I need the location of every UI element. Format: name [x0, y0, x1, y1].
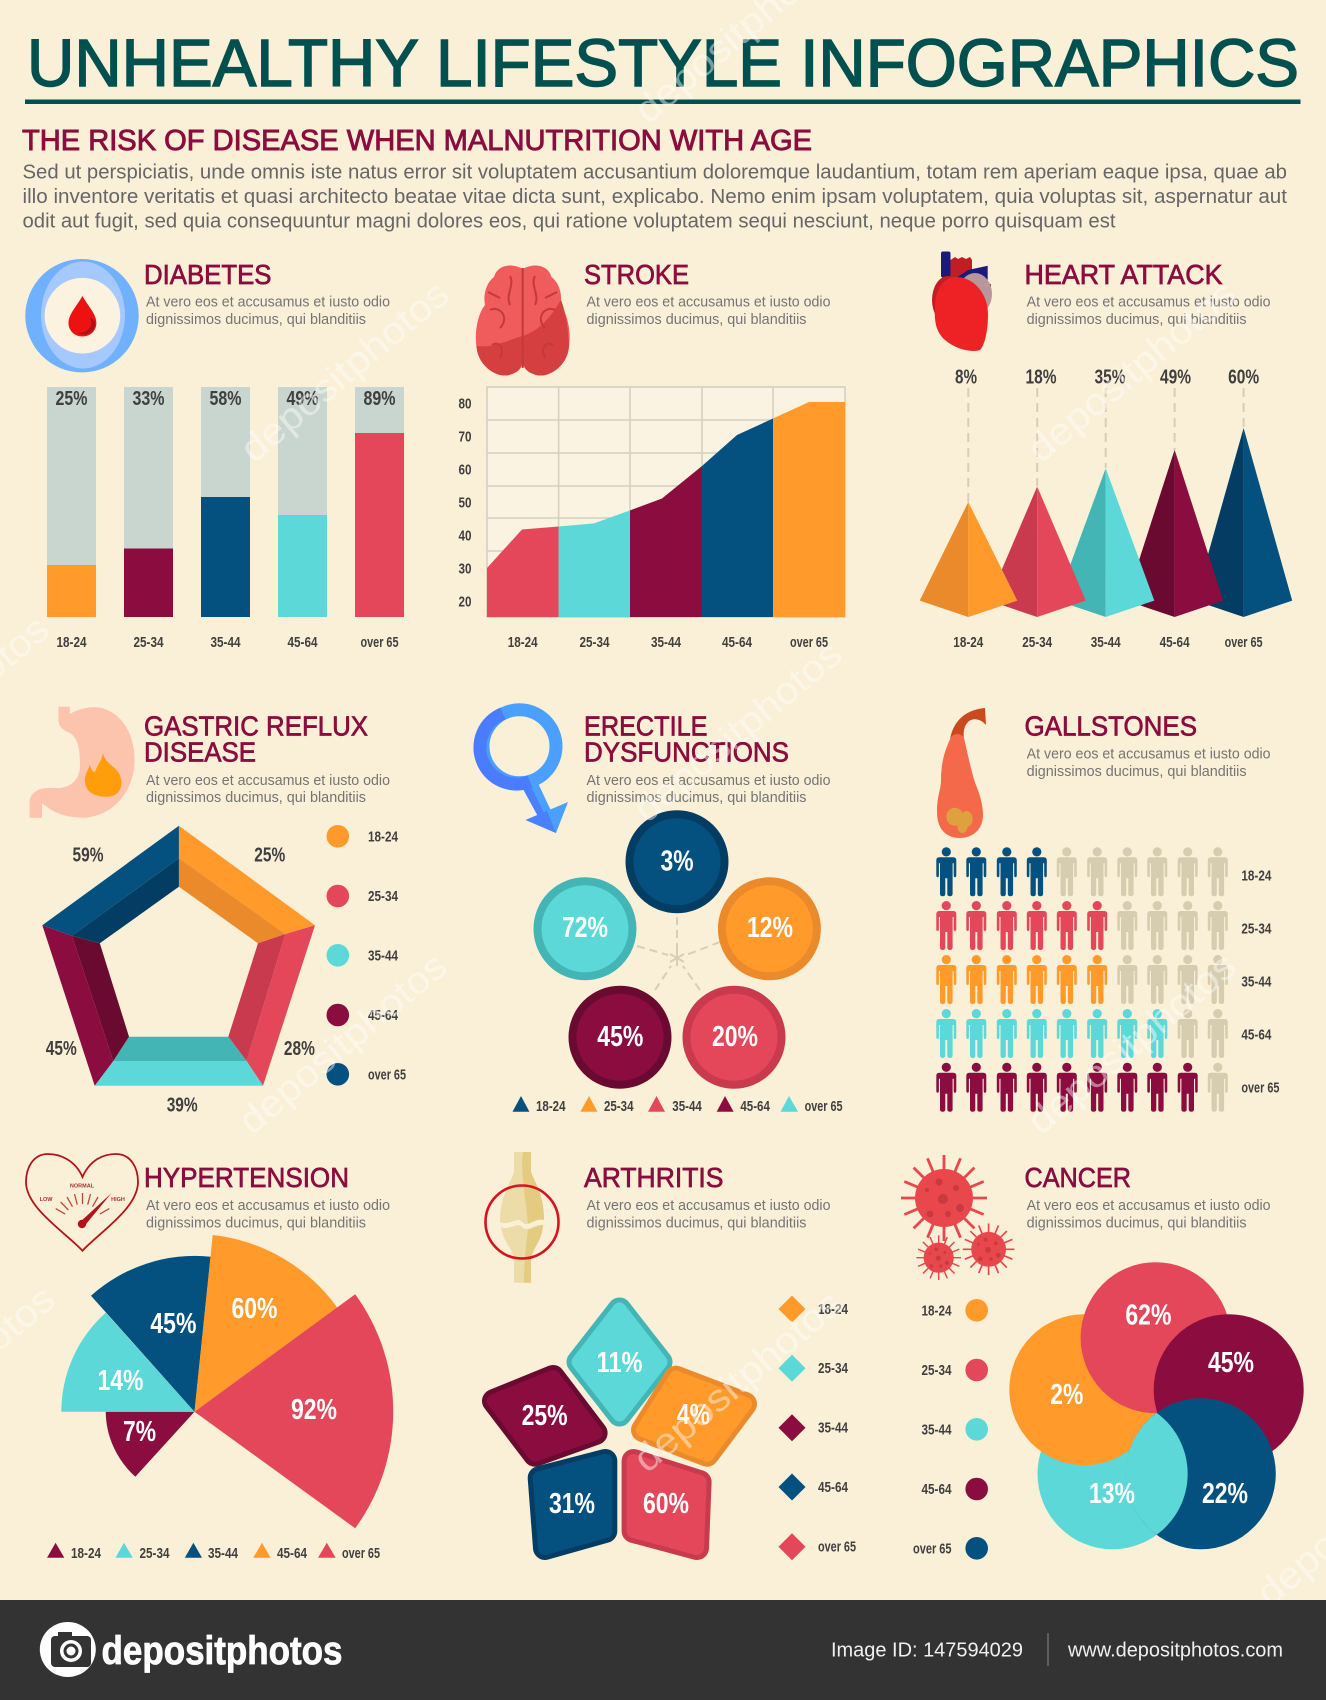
bubble chart: 3%: [660, 846, 694, 878]
area chart: 18-24: [508, 634, 538, 651]
bubble chart: 12%: [747, 912, 793, 944]
bar chart: 33%: [132, 388, 165, 410]
area chart: 20: [458, 594, 472, 610]
panel: heart attack: [920, 252, 1292, 651]
legend: 45-64: [368, 1007, 399, 1024]
icon: blood drop ring: [25, 259, 139, 372]
area chart: over 65: [790, 634, 828, 651]
subtitle: THE RISK OF DISEASE WHEN MALNUTRITION WITH AGE: [22, 125, 812, 157]
description: At vero eos et accusamus et iusto odio: [1027, 294, 1271, 310]
description: At vero eos et accusamus et iusto odio: [586, 1198, 830, 1214]
pictogram chart: over 65: [1241, 1080, 1279, 1096]
heading: ARTHRITIS: [584, 1162, 724, 1193]
pictogram chart: 45-64: [1241, 1026, 1272, 1044]
description: At vero eos et accusamus et iusto odio: [586, 773, 830, 789]
polar pie chart: 92%: [291, 1394, 337, 1426]
footer bar: [0, 1600, 1326, 1700]
bar chart: 45-64: [288, 634, 318, 651]
heading: [144, 710, 368, 768]
icon: male symbol: [480, 710, 568, 833]
area chart: 60: [458, 462, 472, 478]
divider and site url: www.depositphotos.com: [1067, 1640, 1283, 1662]
logo wordmark: depositphotos: [102, 1629, 342, 1673]
description: [1027, 294, 1271, 328]
pyramid chart: 45-64: [1160, 634, 1190, 651]
description: [146, 773, 390, 806]
legend: [326, 825, 406, 1086]
legend: 25-34: [368, 888, 399, 905]
legend: 35-44: [818, 1420, 849, 1436]
area chart: 30: [458, 560, 472, 578]
description: dignissimos ducimus, qui blanditiis: [1027, 1216, 1247, 1232]
description: dignissimos ducimus, qui blanditiis: [586, 1216, 806, 1232]
description: [146, 1198, 390, 1232]
legend: 18-24: [818, 1301, 849, 1318]
legend: 45-64: [922, 1481, 952, 1498]
polar pie chart: 7%: [123, 1416, 156, 1448]
icon: heart gauge: LOW: [40, 1197, 53, 1203]
pentagon chart: 25%: [254, 844, 285, 866]
watermarks: depositphotos: [626, 633, 850, 831]
bubble chart: [538, 814, 817, 1085]
legend: 25-34: [604, 1098, 634, 1115]
description: dignissimos ducimus, qui blanditiis: [586, 312, 806, 328]
description: dignissimos ducimus, qui blanditiis: [1027, 312, 1247, 328]
heading: GASTRIC REFLUX: [144, 710, 368, 742]
bar chart: 49%: [286, 388, 319, 410]
description: At vero eos et accusamus et iusto odio: [146, 773, 390, 789]
bar chart: 18-24: [56, 634, 87, 651]
rounded pentagon chart: 25%: [522, 1400, 568, 1432]
rounded pentagon chart: 31%: [549, 1488, 595, 1520]
description: At vero eos et accusamus et iusto odio: [146, 1198, 390, 1214]
heading: ERECTILE: [584, 710, 708, 742]
watermarks: depositphotos: [626, 1283, 850, 1481]
bar chart: 89%: [364, 388, 396, 410]
pentagon chart: 28%: [284, 1038, 315, 1060]
legend: over 65: [913, 1540, 952, 1558]
pentagon chart: [42, 826, 315, 1116]
panel: cancer: [901, 1155, 1304, 1560]
legend: 18-24: [368, 828, 399, 846]
image id: Image ID: 147594029: [831, 1640, 1023, 1662]
venn chart: 2%: [1050, 1379, 1083, 1411]
panel: arthritis: [486, 1152, 856, 1560]
icon: heart gauge: [26, 1154, 138, 1251]
pyramid chart: over 65: [1225, 634, 1263, 651]
heading: DISEASE: [144, 736, 256, 768]
pyramid chart: 35%: [1094, 366, 1126, 388]
bar chart: 35-44: [210, 634, 241, 651]
icon: camera logo: [40, 1622, 96, 1677]
pictogram chart: 18-24: [1241, 868, 1272, 884]
panel: diabetes: [25, 259, 404, 651]
legend: 45-64: [740, 1098, 770, 1115]
icon: heart gauge: HIGH: [111, 1197, 125, 1203]
description: [586, 294, 830, 328]
pictogram chart: 35-44: [1241, 974, 1272, 990]
pictogram chart: [936, 847, 1279, 1112]
polar pie chart: 14%: [98, 1365, 144, 1397]
heading: GALLSTONES: [1024, 710, 1197, 742]
heading: HYPERTENSION: [144, 1162, 349, 1193]
title: UNHEALTHY LIFESTYLE INFOGRAPHICS: [27, 26, 1299, 101]
legend: [913, 1299, 988, 1560]
legend: 35-44: [208, 1545, 239, 1562]
rounded pentagon chart: 60%: [643, 1488, 689, 1520]
pyramid chart: 18%: [1026, 366, 1057, 388]
description: At vero eos et accusamus et iusto odio: [586, 294, 830, 310]
pentagon chart: 59%: [72, 844, 104, 866]
bar chart: [47, 387, 404, 651]
heading: DIABETES: [144, 259, 272, 290]
legend: 45-64: [818, 1479, 849, 1496]
bar chart: 25%: [56, 388, 88, 410]
venn chart: 62%: [1125, 1300, 1172, 1332]
area chart: [458, 387, 845, 651]
description: [586, 773, 830, 806]
description: dignissimos ducimus, qui blanditiis: [1027, 764, 1247, 780]
pyramid chart: 35-44: [1091, 634, 1121, 651]
legend: 25-34: [140, 1545, 170, 1562]
description: [146, 294, 390, 328]
watermarks: depositphotos: [1020, 945, 1244, 1143]
icon: stomach with flame: [30, 707, 135, 818]
description: At vero eos et accusamus et iusto odio: [146, 294, 390, 310]
description: dignissimos ducimus, qui blanditiis: [586, 790, 806, 806]
icon: cancer cells: [901, 1155, 1014, 1280]
polar pie chart: 45%: [150, 1308, 197, 1340]
description: dignissimos ducimus, qui blanditiis: [146, 1216, 366, 1232]
icon: heart gauge: NORMAL: [70, 1184, 95, 1190]
legend: 35-44: [922, 1422, 952, 1438]
heading: [584, 710, 789, 768]
intro text block: [22, 162, 1287, 232]
panel: gastric reflux disease: [30, 707, 406, 1116]
description: At vero eos et accusamus et iusto odio: [1027, 1198, 1271, 1214]
venn chart: 45%: [1208, 1347, 1254, 1379]
legend: [778, 1296, 856, 1560]
bar chart: 58%: [210, 388, 242, 410]
rounded pentagon chart: [494, 1310, 745, 1548]
watermarks: depositphotos: [233, 273, 457, 471]
watermarks: depositphotos: [1020, 273, 1244, 471]
description: [1027, 746, 1271, 780]
heading: DYSFUNCTIONS: [584, 736, 789, 768]
pentagon chart: 45%: [46, 1038, 77, 1060]
venn chart: [1009, 1262, 1304, 1549]
intro text block: odit aut fugit, sed quia consequuntur magni dolores eos, qui ratione voluptatem sequi nesciunt, neque porro quisquam est: [22, 210, 1116, 232]
panel: hypertension: [26, 1154, 393, 1562]
pictogram chart: 25-34: [1241, 920, 1272, 938]
legend: 45-64: [277, 1545, 308, 1562]
legend: over 65: [805, 1098, 843, 1115]
description: dignissimos ducimus, qui blanditiis: [146, 312, 366, 328]
rounded pentagon chart: 11%: [596, 1347, 643, 1379]
pentagon chart: 39%: [167, 1094, 198, 1116]
legend: 25-34: [818, 1360, 849, 1377]
legend: [47, 1543, 380, 1562]
rounded pentagon chart: 4%: [677, 1399, 710, 1431]
legend: over 65: [342, 1545, 380, 1562]
pyramid chart: 60%: [1228, 366, 1259, 388]
description: [586, 1198, 830, 1232]
icon: gallbladder: [937, 708, 986, 838]
legend: [512, 1096, 843, 1115]
description: [1027, 1198, 1271, 1232]
watermarks: depositphotos: [231, 945, 455, 1143]
icon: knee joint: [486, 1152, 558, 1283]
bar chart: over 65: [360, 634, 398, 651]
pyramid chart: [920, 366, 1292, 651]
pyramid chart: 18-24: [953, 634, 984, 651]
area chart: 25-34: [580, 634, 610, 651]
panel: gallstones: [936, 708, 1279, 1112]
bar chart: 25-34: [134, 634, 164, 651]
bubble chart: 72%: [562, 912, 608, 944]
legend: 35-44: [672, 1098, 702, 1115]
intro text block: Sed ut perspiciatis, unde omnis iste natus error sit voluptatem accusantium doloremque laudantium, totam rem aperiam eaque ipsa, quae ab: [22, 162, 1287, 184]
legend: 18-24: [922, 1302, 952, 1320]
bubble chart: 20%: [712, 1021, 758, 1053]
area chart: 40: [458, 528, 472, 544]
venn chart: 22%: [1202, 1478, 1248, 1510]
area chart: 35-44: [651, 634, 682, 651]
heading: CANCER: [1024, 1162, 1131, 1193]
bubble chart: 45%: [597, 1021, 643, 1053]
pyramid chart: 8%: [955, 366, 977, 388]
legend: 18-24: [71, 1545, 102, 1562]
panel: erectile dysfunctions: [480, 710, 843, 1115]
heading: HEART ATTACK: [1024, 259, 1223, 290]
heading: STROKE: [584, 259, 689, 290]
venn chart: 13%: [1089, 1478, 1135, 1510]
legend: 35-44: [368, 948, 399, 964]
area chart: 45-64: [722, 634, 753, 651]
area chart: 70: [458, 428, 472, 446]
legend: 18-24: [536, 1098, 566, 1115]
area chart: 80: [458, 396, 472, 412]
panel: stroke: [458, 259, 845, 651]
icon: heart: [932, 252, 992, 351]
polar pie chart: [61, 1235, 393, 1528]
icon: brain: [476, 266, 570, 376]
area chart: 50: [458, 494, 472, 512]
pyramid chart: 49%: [1160, 366, 1191, 388]
legend: over 65: [368, 1066, 406, 1084]
intro text block: illo inventore veritatis et quasi architecto beatae vitae dicta sunt, explicabo. Nemo enim ipsam voluptatem, quia voluptas sit, aspernatur aut: [22, 186, 1287, 208]
legend: over 65: [818, 1538, 856, 1556]
legend: 25-34: [922, 1362, 952, 1379]
description: At vero eos et accusamus et iusto odio: [1027, 746, 1271, 762]
polar pie chart: 60%: [232, 1293, 278, 1325]
description: dignissimos ducimus, qui blanditiis: [146, 790, 366, 806]
pyramid chart: 25-34: [1022, 634, 1053, 651]
